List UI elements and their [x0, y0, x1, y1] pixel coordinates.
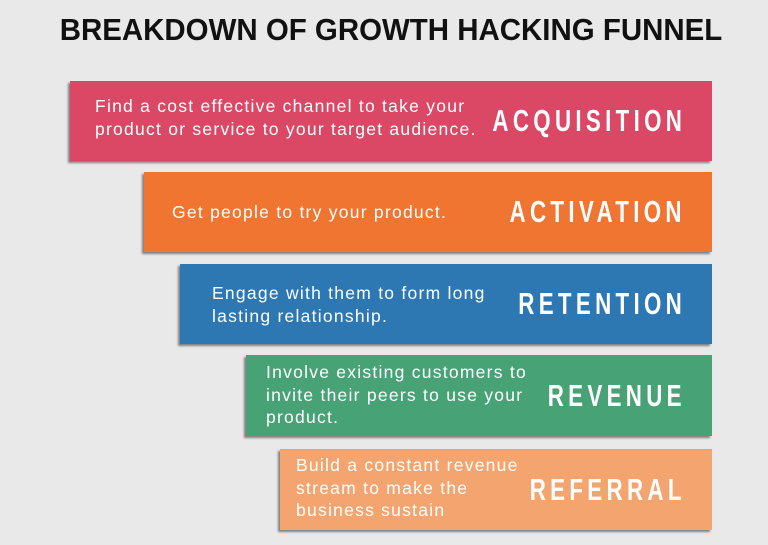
panel: revenue — [246, 355, 712, 436]
label: acquisition: ACQUISITION — [492, 103, 686, 138]
text: referral description: Build a constant revenue — [296, 455, 519, 475]
text: retention description: Engage with them to form long — [212, 283, 486, 303]
text: revenue description: product. — [266, 407, 339, 427]
text: referral description — [296, 455, 519, 520]
text: referral description: business sustain — [296, 500, 445, 520]
text: retention description — [212, 283, 486, 326]
text: retention description: lasting relationship. — [212, 306, 388, 326]
text: acquisition description: product or service to your target audience. — [95, 119, 477, 139]
text: acquisition description — [95, 96, 477, 139]
text: revenue description: Involve existing customers to — [266, 362, 527, 382]
panel: acquisition — [70, 81, 712, 161]
panel: referral — [280, 449, 712, 530]
text: revenue description — [266, 362, 527, 427]
panel: activation — [144, 172, 712, 252]
label: activation: ACTIVATION — [510, 194, 686, 229]
label: referral: REFERRAL — [530, 472, 686, 506]
title: BREAKDOWN OF GROWTH HACKING FUNNEL — [60, 12, 722, 47]
label: retention: RETENTION — [518, 286, 686, 321]
text: acquisition description: Find a cost effective channel to take your — [95, 96, 465, 116]
panel: retention — [180, 264, 712, 344]
text: referral description: stream to make the — [296, 478, 468, 498]
text: activation description: Get people to try your product. — [172, 202, 447, 222]
label: revenue: REVENUE — [548, 378, 686, 412]
text: revenue description: invite their peers to use your — [266, 384, 523, 404]
